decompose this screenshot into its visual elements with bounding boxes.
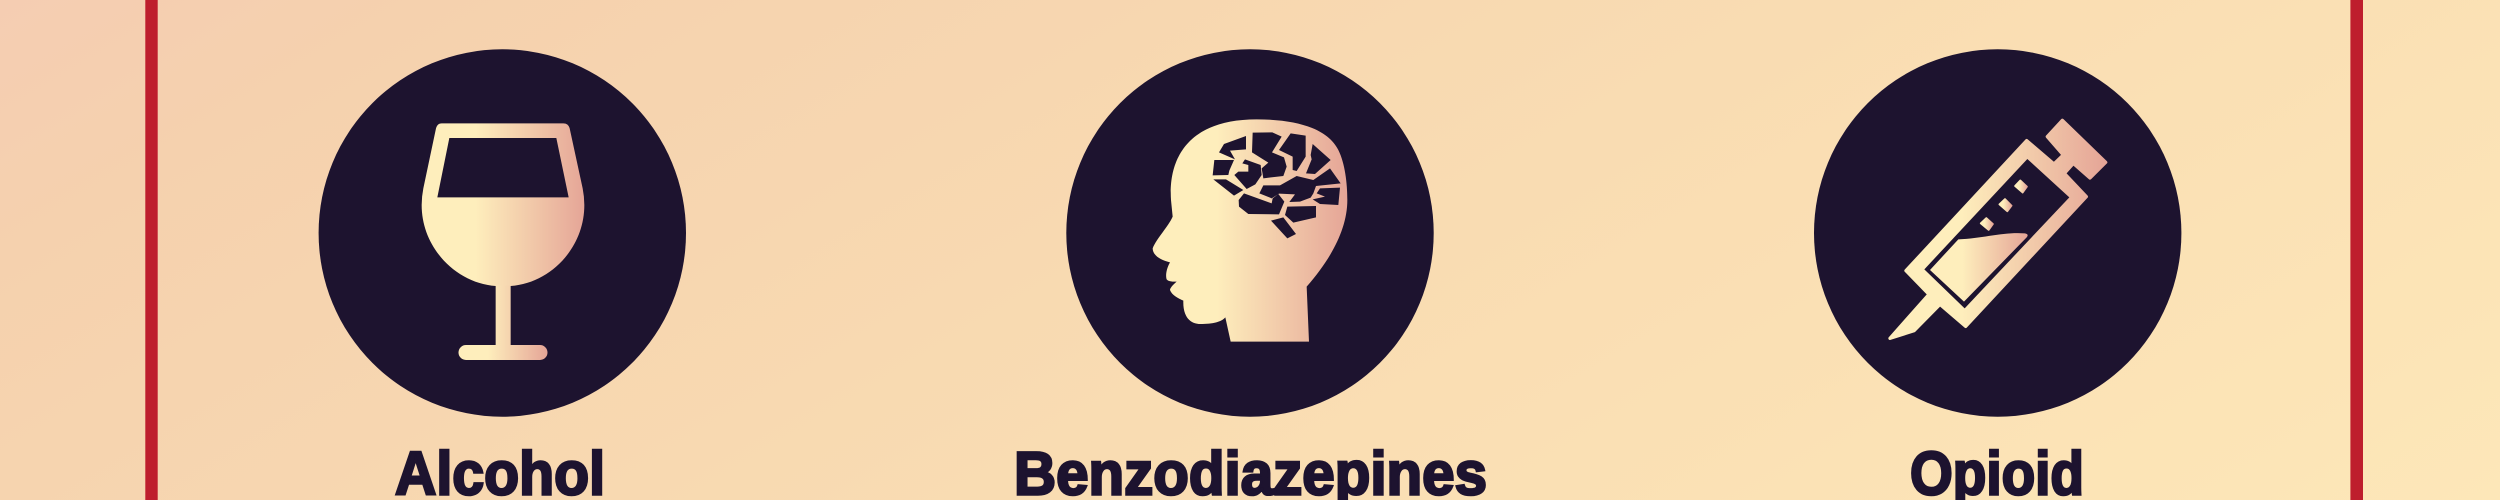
right red vertical rule [2350,0,2363,500]
panel: benzodiazepines [1014,49,1487,500]
left red vertical rule [145,0,158,500]
icon: wine glass in dark circle [319,49,686,417]
icon: syringe in dark circle [1814,49,2181,417]
icon: head with cracked brain in dark circle [1066,49,1434,417]
panel: opioid [1814,49,2181,500]
panel: alcohol [319,49,686,500]
